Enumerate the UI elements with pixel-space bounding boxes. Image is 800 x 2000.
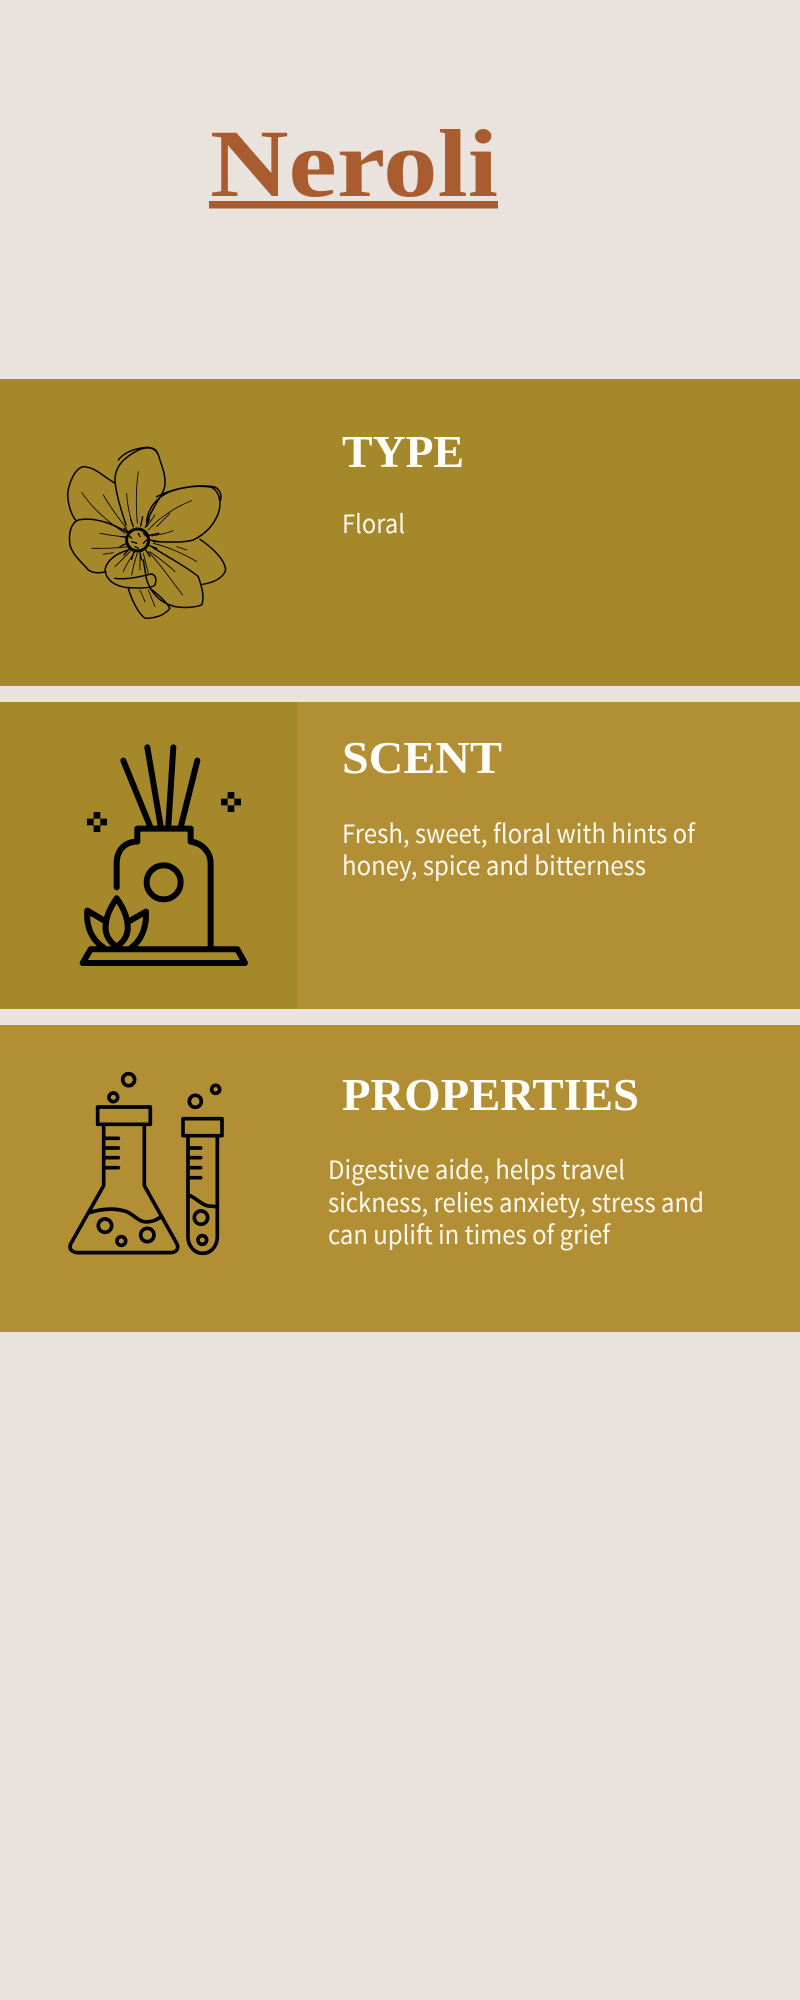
panel: properties (0, 1025, 800, 1332)
text: scent description: Fresh, sweet, floral with hints of (342, 814, 697, 851)
heading: scent: SCENT (342, 733, 502, 783)
panel: type (0, 379, 800, 686)
heading: type: TYPE (342, 427, 464, 477)
icon: neroli flower (68, 447, 226, 618)
heading: properties: PROPERTIES (342, 1070, 639, 1120)
title: Neroli (210, 110, 498, 217)
panel: scent (0, 702, 800, 1009)
text: properties description (328, 1150, 704, 1252)
text: type value: Floral (342, 504, 405, 541)
text: properties description: can uplift in times of grief (328, 1215, 612, 1252)
icon: lab flask and test tube (70, 1074, 222, 1253)
text: scent description (342, 814, 697, 883)
text: properties description: sickness, relies anxiety, stress and (328, 1183, 704, 1220)
text: scent description: honey, spice and bitterness (342, 846, 646, 883)
text: properties description: Digestive aide, helps travel (328, 1150, 625, 1187)
icon: reed diffuser (83, 747, 245, 963)
